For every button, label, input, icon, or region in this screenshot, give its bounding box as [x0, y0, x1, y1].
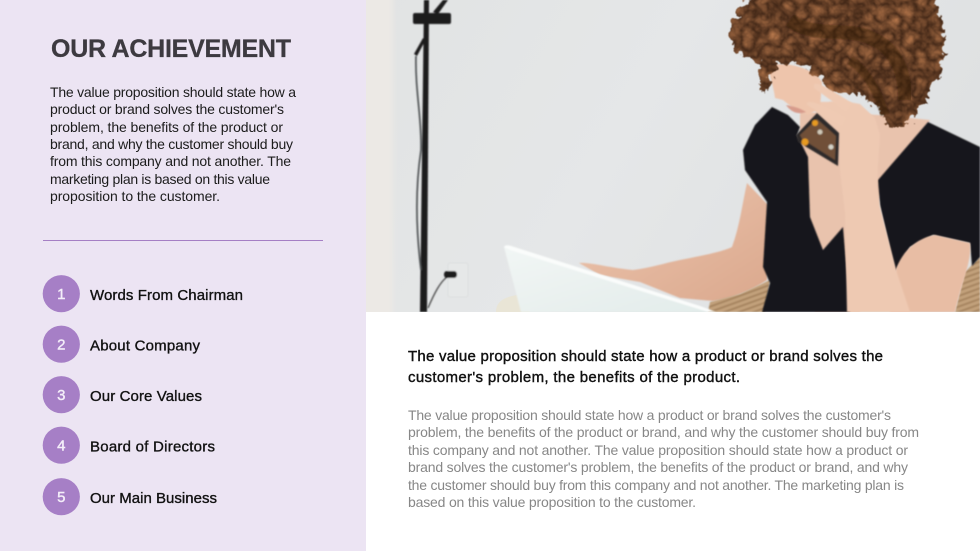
forearm and hand — [807, 100, 910, 312]
black shirt left — [743, 107, 850, 312]
description body: this company and not another. The value proposition should state how a product or — [408, 442, 908, 458]
description heading: The value proposition should state how a product or brand solves the — [408, 348, 883, 365]
fingers — [821, 85, 852, 103]
laptop — [504, 245, 716, 312]
black shirt right — [878, 122, 980, 272]
curly hair — [726, 0, 942, 126]
photo: woman on phone with laptop — [340, 0, 980, 322]
lips — [786, 105, 806, 113]
list item 5: 5 — [57, 489, 65, 506]
description body — [408, 407, 919, 510]
list item 3: 3 — [57, 387, 65, 404]
intro paragraph: brand, and why the customer should buy — [50, 136, 293, 152]
list item 1 — [43, 275, 243, 312]
panel: left sidebar — [0, 0, 366, 551]
phone — [796, 113, 839, 166]
hair shadow — [790, 20, 905, 115]
list item 2 — [43, 326, 200, 363]
neck and chest skin — [800, 112, 930, 312]
list item 3 — [43, 376, 202, 413]
wicker chair — [708, 257, 980, 312]
list item 2: 2 — [57, 337, 65, 354]
description body: The value proposition should state how a product or brand solves the customer's — [408, 407, 891, 423]
numbered list — [43, 275, 243, 515]
description body: the customer should buy from this company and not another. The marketing plan is — [408, 477, 904, 493]
intro paragraph — [50, 84, 296, 204]
list item 1: Words From Chairman — [90, 287, 243, 304]
list item 4: 4 — [57, 438, 65, 455]
intro paragraph: from this company and not another. The — [50, 153, 291, 169]
description body: based on this value proposition to the customer. — [408, 494, 696, 510]
face — [768, 64, 822, 115]
list item 4: Board of Directors — [90, 438, 215, 456]
description body: problem, the benefits of the product or brand, and why the customer should buy from — [408, 424, 919, 440]
left arm — [579, 183, 768, 301]
upper arm — [890, 235, 970, 312]
wall socket and cable — [427, 270, 458, 309]
description heading: customer's problem, the benefits of the product. — [408, 369, 740, 386]
intro paragraph: proposition to the customer. — [50, 188, 220, 204]
list item 3: Our Core Values — [90, 388, 202, 405]
title: OUR ACHIEVEMENT — [51, 35, 291, 63]
description body: brand solves the customer's problem, the benefits of the product or brand, and why — [408, 459, 908, 475]
description heading — [408, 348, 883, 386]
list item 5 — [43, 478, 217, 515]
intro paragraph: marketing plan is based on this value — [50, 171, 270, 187]
intro paragraph: The value proposition should state how a — [50, 84, 296, 100]
lamp stand — [413, 0, 451, 312]
intro paragraph: product or brand solves the customer's — [50, 101, 284, 117]
panel: description — [408, 348, 919, 510]
list item 2: About Company — [90, 338, 200, 354]
list item 1: 1 — [57, 286, 65, 303]
list item 4 — [43, 427, 215, 464]
list item 5: Our Main Business — [90, 490, 217, 507]
intro paragraph: problem, the benefits of the product or — [50, 119, 283, 135]
planter — [496, 296, 522, 312]
